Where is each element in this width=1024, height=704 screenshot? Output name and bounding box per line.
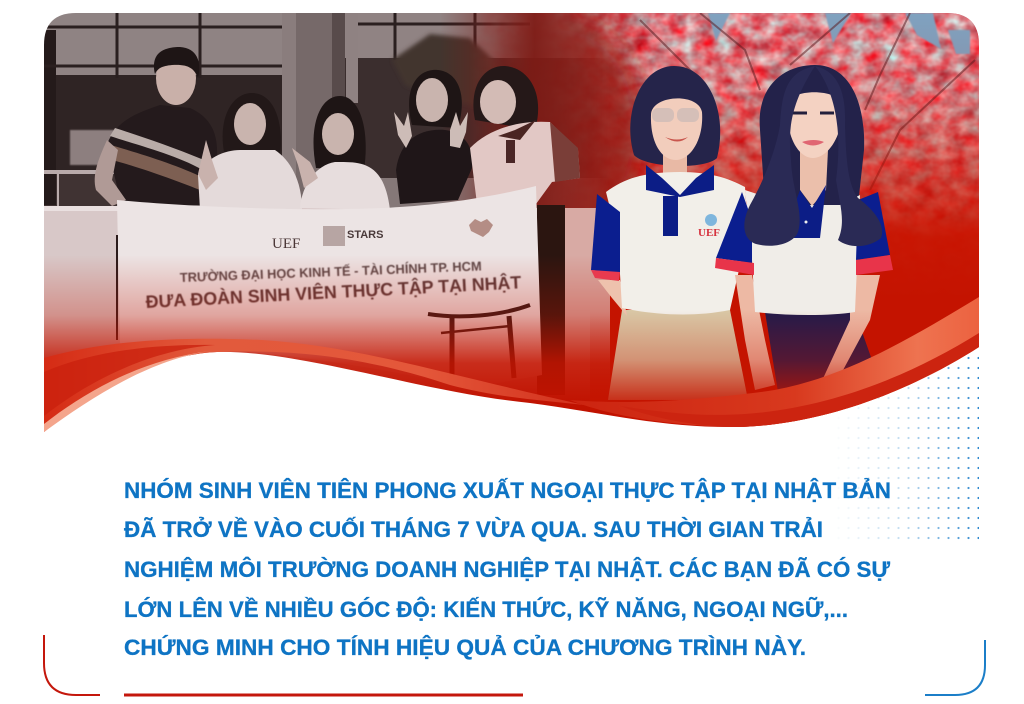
white wave base <box>40 347 985 450</box>
white shirt <box>606 172 748 314</box>
collar <box>646 165 714 197</box>
torii gate <box>428 305 530 378</box>
neck <box>800 150 828 206</box>
photo: two students in uniform <box>590 65 900 410</box>
woman 5 <box>470 66 580 395</box>
text block: introduction <box>124 478 891 660</box>
frame corner: blue bottom right <box>925 640 985 695</box>
banner logos <box>272 219 493 248</box>
hair <box>630 66 720 166</box>
photo: wall behind banner <box>44 206 610 390</box>
photo: group of five with banner <box>44 47 614 435</box>
ribbon: right wave <box>570 297 979 427</box>
woman 3 <box>292 96 390 210</box>
line 1: NHÓM SINH VIÊN TIÊN PHONG XUẤT NGOẠI THỰC TẬP TẠI NHẬT BẢN <box>124 478 891 503</box>
skirt <box>765 312 872 392</box>
accent bar: red underline <box>124 694 523 696</box>
neck <box>663 154 687 173</box>
arm <box>598 280 627 316</box>
banner <box>117 186 542 388</box>
student right <box>715 65 893 392</box>
woman 4 <box>394 70 472 204</box>
face <box>790 92 838 158</box>
red fade bottom <box>44 255 614 435</box>
fade into red <box>590 318 871 400</box>
pants <box>608 310 748 400</box>
collar and placket <box>792 185 826 238</box>
line 3: NGHIỆM MÔI TRƯỜNG DOANH NGHIỆP TẠI NHẬT. CÁC BẠN ĐÃ CÓ SỰ <box>124 557 890 582</box>
line 2: ĐÃ TRỞ VỀ VÀO CUỐI THÁNG 7 VỪA QUA. SAU THỜI GIAN TRẢI <box>124 516 823 542</box>
line 4: LỚN LÊN VỀ NHIỀU GÓC ĐỘ: KIẾN THỨC, KỸ NĂNG, NGOẠI NGỮ,... <box>124 597 848 622</box>
face <box>651 98 702 160</box>
woman 2 <box>198 93 302 210</box>
photo: cherry blossom backdrop <box>440 13 980 435</box>
student left: UEF <box>698 227 720 239</box>
student left <box>591 66 748 400</box>
photo: airport background of group shot <box>44 13 615 213</box>
banner logos: STARS <box>347 229 383 241</box>
sleeve <box>591 194 620 273</box>
sleeves <box>716 192 752 263</box>
line 5: CHỨNG MINH CHO TÍNH HIỆU QUẢ CỦA CHƯƠNG TRÌNH NÀY. <box>124 635 806 660</box>
arms <box>735 275 775 390</box>
frame corner: red bottom left <box>44 635 100 695</box>
panel: hero photo collage <box>44 13 980 435</box>
man <box>95 47 217 207</box>
logo <box>705 214 717 226</box>
photo: dark red foliage blending the two photos <box>440 13 650 208</box>
ribbon: left wave <box>44 339 585 432</box>
dot pattern <box>848 356 979 540</box>
banner text: TRƯỜNG ĐẠI HỌC KINH TẾ - TÀI CHÍNH TP. HCM <box>180 258 482 285</box>
hair front <box>744 66 815 246</box>
banner text: ĐƯA ĐOÀN SINH VIÊN THỰC TẬP TẠI NHẬT <box>145 271 522 312</box>
banner logos: UEF <box>272 236 300 252</box>
shirt <box>745 190 860 315</box>
back hair <box>760 65 864 205</box>
